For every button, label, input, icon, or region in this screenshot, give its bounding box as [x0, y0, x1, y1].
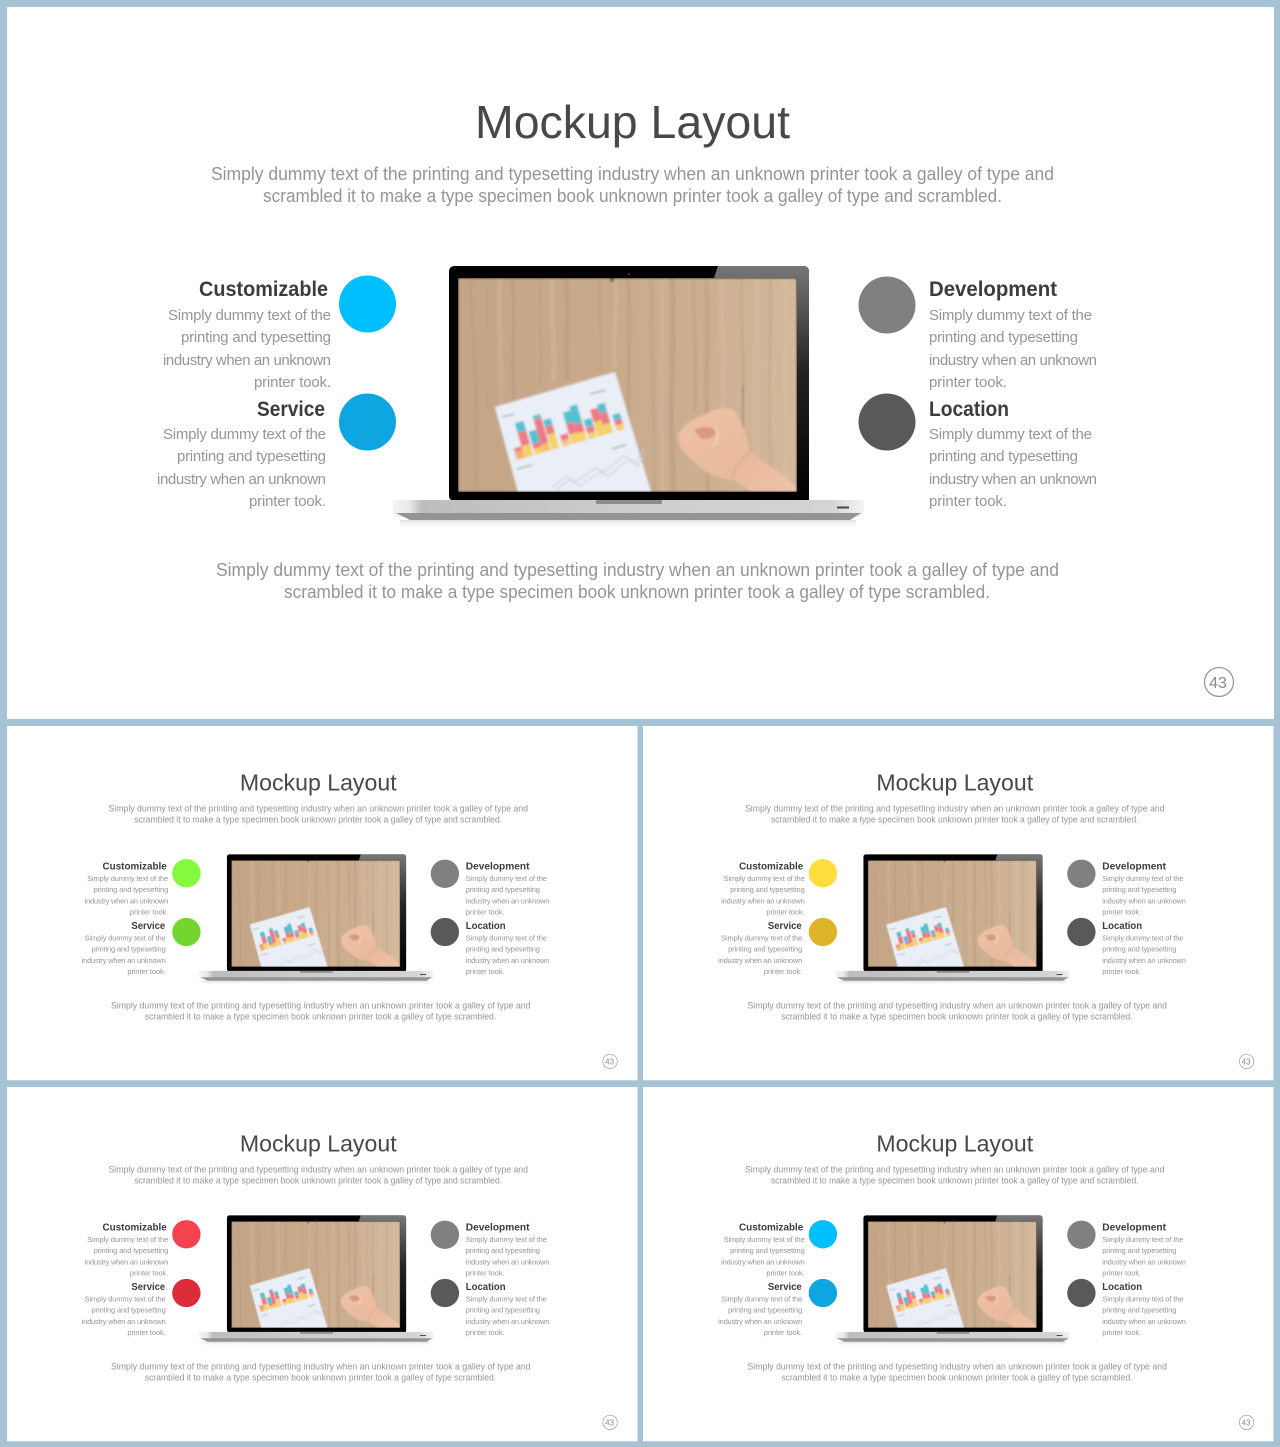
- feature: Development: [1102, 861, 1186, 917]
- icon: bright blue circle: [809, 1220, 837, 1248]
- feature: Location: [1102, 1282, 1186, 1337]
- laptop mockup: [836, 1215, 1070, 1346]
- feature: Service: printing and typesetting: [92, 1305, 166, 1314]
- closing text: scrambled it to make a type specimen book unknown printer took a galley of type scrambled.: [145, 1373, 496, 1383]
- feature: Service: printer took.: [127, 1328, 166, 1337]
- feature: Customizable: printing and typesetting: [181, 329, 331, 346]
- feature: Development: Development: [1102, 861, 1166, 872]
- closing text: scrambled it to make a type specimen book unknown printer took a galley of type scrambled.: [145, 1012, 496, 1022]
- feature: Customizable: Simply dummy text of the: [87, 1235, 168, 1244]
- feature: Development: industry when an unknown: [1102, 1258, 1186, 1267]
- feature: Service: [718, 1282, 802, 1337]
- feature: Customizable: Simply dummy text of the: [87, 874, 168, 883]
- closing text: Simply dummy text of the printing and typesetting industry when an unknown printer took a galley of type and: [747, 1362, 1167, 1372]
- icon: dark grey circle: [858, 394, 916, 450]
- feature: Customizable: industry when an unknown: [85, 897, 168, 906]
- feature: Development: Development: [929, 278, 1057, 301]
- feature: Development: printing and typesetting: [466, 1246, 540, 1255]
- feature: Location: industry when an unknown: [466, 956, 549, 965]
- feature: Customizable: printer took.: [130, 1269, 168, 1278]
- laptop mockup: [393, 266, 864, 529]
- feature: Location: [466, 921, 549, 976]
- icon: deep blue circle: [339, 394, 396, 450]
- feature: Location: printing and typesetting: [1102, 1305, 1176, 1314]
- feature: Service: [82, 921, 166, 976]
- intro text: Simply dummy text of the printing and typesetting industry when an unknown printer took a galley of type and: [109, 804, 528, 814]
- feature: Location: printing and typesetting: [466, 1305, 540, 1314]
- feature: Customizable: printer took.: [130, 908, 168, 917]
- feature: Development: industry when an unknown: [466, 897, 549, 906]
- feature: Location: [929, 398, 1097, 510]
- feature: Service: Service: [768, 921, 802, 932]
- feature: Location: printer took.: [929, 493, 1007, 510]
- feature: Development: printing and typesetting: [1102, 885, 1176, 894]
- feature: Customizable: Simply dummy text of the: [168, 307, 331, 324]
- closing text: scrambled it to make a type specimen book unknown printer took a galley of type scrambled.: [284, 582, 990, 602]
- intro text: [745, 804, 1165, 825]
- feature: Service: printing and typesetting: [92, 944, 166, 953]
- feature: Development: Simply dummy text of the: [929, 307, 1092, 324]
- feature: Development: printer took.: [466, 908, 505, 917]
- feature: Location: [466, 1282, 549, 1337]
- feature: Location: printer took.: [1102, 967, 1141, 976]
- icon: bright blue circle: [339, 276, 396, 332]
- feature: Service: printing and typesetting: [177, 448, 326, 465]
- feature: Service: Simply dummy text of the: [85, 1294, 166, 1303]
- icon: dark grey circle: [431, 1279, 459, 1307]
- feature: Development: Development: [1102, 1222, 1166, 1233]
- page number: [1239, 1054, 1254, 1069]
- feature: Development: printer took.: [1102, 1269, 1141, 1278]
- intro text: Simply dummy text of the printing and typesetting industry when an unknown printer took a galley of type and: [745, 804, 1165, 814]
- feature: Location: printer took.: [466, 1328, 505, 1337]
- intro text: Simply dummy text of the printing and typesetting industry when an unknown printer took a galley of type and: [211, 164, 1054, 184]
- icon: light yellow circle: [809, 859, 837, 887]
- feature: Development: Development: [466, 861, 530, 872]
- feature: Customizable: [163, 278, 331, 391]
- feature: Service: printer took.: [249, 493, 326, 510]
- laptop mockup: [836, 854, 1070, 985]
- feature: Customizable: Customizable: [739, 861, 803, 872]
- closing text: [216, 560, 1059, 602]
- feature: Customizable: printer took.: [254, 374, 331, 391]
- closing text: [111, 1001, 531, 1022]
- feature: Service: printer took.: [127, 967, 166, 976]
- laptop mockup: [199, 854, 433, 985]
- icon: grey circle: [1067, 860, 1096, 888]
- feature: Service: industry when an unknown: [718, 956, 802, 965]
- panel: large slide, blue: [7, 7, 1274, 719]
- feature: Location: printing and typesetting: [466, 944, 540, 953]
- feature: Development: [1102, 1222, 1186, 1278]
- feature: Service: [157, 398, 326, 510]
- intro text: [211, 164, 1054, 206]
- icon: grey circle: [431, 1221, 459, 1249]
- feature: Customizable: Simply dummy text of the: [724, 874, 805, 883]
- icon: light red circle: [172, 1220, 201, 1248]
- feature: Location: industry when an unknown: [1102, 1317, 1186, 1326]
- feature: Service: industry when an unknown: [82, 956, 166, 965]
- feature: Development: printer took.: [929, 374, 1007, 391]
- feature: Customizable: Customizable: [103, 861, 167, 872]
- feature: Customizable: [85, 1222, 168, 1278]
- feature: Location: printing and typesetting: [1102, 944, 1176, 953]
- icon: light green circle: [172, 859, 201, 887]
- feature: Development: printing and typesetting: [466, 885, 540, 894]
- icon: green circle: [172, 918, 201, 946]
- feature: Location: Location: [1102, 1282, 1142, 1293]
- feature: Service: Service: [131, 921, 165, 932]
- feature: Service: [82, 1282, 166, 1337]
- closing text: scrambled it to make a type specimen book unknown printer took a galley of type scrambled.: [781, 1012, 1133, 1022]
- icon: dark grey circle: [1067, 918, 1096, 946]
- feature: Customizable: printing and typesetting: [730, 1246, 805, 1255]
- title: Mockup Layout: [240, 1131, 397, 1157]
- feature: Customizable: printing and typesetting: [94, 885, 168, 894]
- feature: Service: Service: [257, 398, 325, 421]
- feature: Development: printing and typesetting: [1102, 1246, 1176, 1255]
- closing text: Simply dummy text of the printing and typesetting industry when an unknown printer took a galley of type and: [111, 1362, 531, 1372]
- feature: Customizable: [721, 1222, 805, 1278]
- feature: Service: printer took.: [764, 967, 802, 976]
- icon: grey circle: [1067, 1221, 1096, 1249]
- feature: Development: industry when an unknown: [466, 1258, 549, 1267]
- feature: Service: Simply dummy text of the: [85, 933, 166, 942]
- feature: Location: industry when an unknown: [466, 1317, 549, 1326]
- feature: Service: Simply dummy text of the: [721, 1294, 802, 1303]
- closing text: [111, 1362, 531, 1383]
- intro text: [109, 804, 528, 825]
- feature: Development: Simply dummy text of the: [466, 1235, 547, 1244]
- feature: Development: Simply dummy text of the: [1102, 874, 1183, 883]
- intro text: scrambled it to make a type specimen book unknown printer took a galley of type and scrambled.: [771, 1176, 1139, 1186]
- feature: Service: printing and typesetting: [728, 944, 802, 953]
- feature: Location: Simply dummy text of the: [466, 933, 547, 942]
- intro text: scrambled it to make a type specimen book unknown printer took a galley of type and scrambled.: [263, 186, 1002, 206]
- feature: Location: printer took.: [1102, 1328, 1141, 1337]
- closing text: Simply dummy text of the printing and typesetting industry when an unknown printer took a galley of type and: [216, 560, 1059, 580]
- feature: Customizable: Customizable: [199, 278, 328, 301]
- page number: [603, 1415, 617, 1430]
- feature: Customizable: printing and typesetting: [94, 1246, 168, 1255]
- feature: Customizable: printer took.: [766, 908, 805, 917]
- icon: dark grey circle: [1067, 1279, 1096, 1307]
- feature: Customizable: industry when an unknown: [721, 1258, 805, 1267]
- feature: Customizable: [721, 861, 805, 917]
- feature: Location: industry when an unknown: [1102, 956, 1186, 965]
- intro text: scrambled it to make a type specimen book unknown printer took a galley of type and scrambled.: [134, 815, 502, 825]
- feature: Service: industry when an unknown: [157, 471, 326, 488]
- icon: dark grey circle: [431, 918, 459, 946]
- feature: Location: Location: [1102, 921, 1142, 932]
- feature: Customizable: Customizable: [739, 1222, 803, 1233]
- feature: Development: industry when an unknown: [1102, 897, 1186, 906]
- feature: Customizable: Simply dummy text of the: [724, 1235, 805, 1244]
- panel: small slide, blue: [643, 1087, 1273, 1441]
- page number: 43: [605, 1057, 615, 1066]
- closing text: [747, 1362, 1167, 1383]
- feature: Development: Simply dummy text of the: [1102, 1235, 1183, 1244]
- feature: Service: industry when an unknown: [82, 1317, 166, 1326]
- feature: Service: [718, 921, 802, 976]
- feature: Service: Service: [131, 1282, 165, 1293]
- feature: Customizable: industry when an unknown: [85, 1258, 168, 1267]
- feature: Development: [466, 1222, 549, 1278]
- icon: grey circle: [858, 276, 916, 334]
- feature: Location: Simply dummy text of the: [929, 426, 1092, 443]
- feature: Development: industry when an unknown: [929, 352, 1097, 369]
- intro text: [109, 1165, 528, 1186]
- closing text: scrambled it to make a type specimen book unknown printer took a galley of type scrambled.: [781, 1373, 1133, 1383]
- icon: deep blue circle: [809, 1279, 837, 1307]
- page number: [603, 1054, 617, 1069]
- feature: Customizable: printer took.: [766, 1269, 805, 1278]
- page number: 43: [1242, 1418, 1251, 1427]
- page number: [1204, 668, 1234, 696]
- feature: Location: printing and typesetting: [929, 448, 1078, 465]
- icon: dark yellow circle: [809, 918, 837, 946]
- feature: Location: Simply dummy text of the: [1102, 933, 1183, 942]
- feature: Service: Service: [768, 1282, 802, 1293]
- feature: Location: Location: [466, 1282, 506, 1293]
- closing text: [747, 1001, 1167, 1022]
- feature: Location: industry when an unknown: [929, 471, 1097, 488]
- page number: 43: [1242, 1057, 1251, 1066]
- page number: 43: [605, 1418, 615, 1427]
- title: Mockup Layout: [475, 96, 790, 148]
- title: Mockup Layout: [876, 1131, 1034, 1157]
- feature: Location: Simply dummy text of the: [1102, 1294, 1183, 1303]
- feature: Development: Development: [466, 1222, 530, 1233]
- title: Mockup Layout: [876, 770, 1034, 796]
- panel: small slide, green: [7, 726, 637, 1080]
- feature: Service: Simply dummy text of the: [163, 426, 326, 443]
- feature: Customizable: printing and typesetting: [730, 885, 805, 894]
- icon: grey circle: [431, 860, 459, 888]
- intro text: Simply dummy text of the printing and typesetting industry when an unknown printer took a galley of type and: [745, 1165, 1165, 1175]
- panel: small slide, red: [7, 1087, 637, 1441]
- feature: Service: printer took.: [764, 1328, 802, 1337]
- laptop mockup: [199, 1215, 433, 1346]
- icon: dark red circle: [172, 1279, 201, 1307]
- feature: Location: Simply dummy text of the: [466, 1294, 547, 1303]
- feature: Customizable: [85, 861, 168, 917]
- feature: Service: Simply dummy text of the: [721, 933, 802, 942]
- panel: small slide, yellow: [643, 726, 1273, 1080]
- intro text: scrambled it to make a type specimen book unknown printer took a galley of type and scrambled.: [771, 815, 1139, 825]
- feature: Development: printing and typesetting: [929, 329, 1078, 346]
- feature: Development: [929, 278, 1097, 391]
- title: Mockup Layout: [240, 770, 397, 796]
- feature: Customizable: Customizable: [103, 1222, 167, 1233]
- feature: Service: industry when an unknown: [718, 1317, 802, 1326]
- intro text: Simply dummy text of the printing and typesetting industry when an unknown printer took a galley of type and: [109, 1165, 528, 1175]
- feature: Service: printing and typesetting: [728, 1305, 802, 1314]
- feature: Customizable: industry when an unknown: [163, 352, 331, 369]
- closing text: Simply dummy text of the printing and typesetting industry when an unknown printer took a galley of type and: [747, 1001, 1167, 1011]
- feature: Development: [466, 861, 549, 917]
- intro text: scrambled it to make a type specimen book unknown printer took a galley of type and scrambled.: [134, 1176, 502, 1186]
- feature: Development: printer took.: [1102, 908, 1141, 917]
- feature: Development: printer took.: [466, 1269, 505, 1278]
- page number: 43: [1209, 675, 1227, 692]
- closing text: Simply dummy text of the printing and typesetting industry when an unknown printer took a galley of type and: [111, 1001, 531, 1011]
- feature: Location: Location: [466, 921, 506, 932]
- feature: Location: printer took.: [466, 967, 505, 976]
- feature: Customizable: industry when an unknown: [721, 897, 805, 906]
- feature: Development: Simply dummy text of the: [466, 874, 547, 883]
- feature: Location: Location: [929, 398, 1009, 421]
- feature: Location: [1102, 921, 1186, 976]
- intro text: [745, 1165, 1165, 1186]
- page number: [1239, 1415, 1254, 1430]
